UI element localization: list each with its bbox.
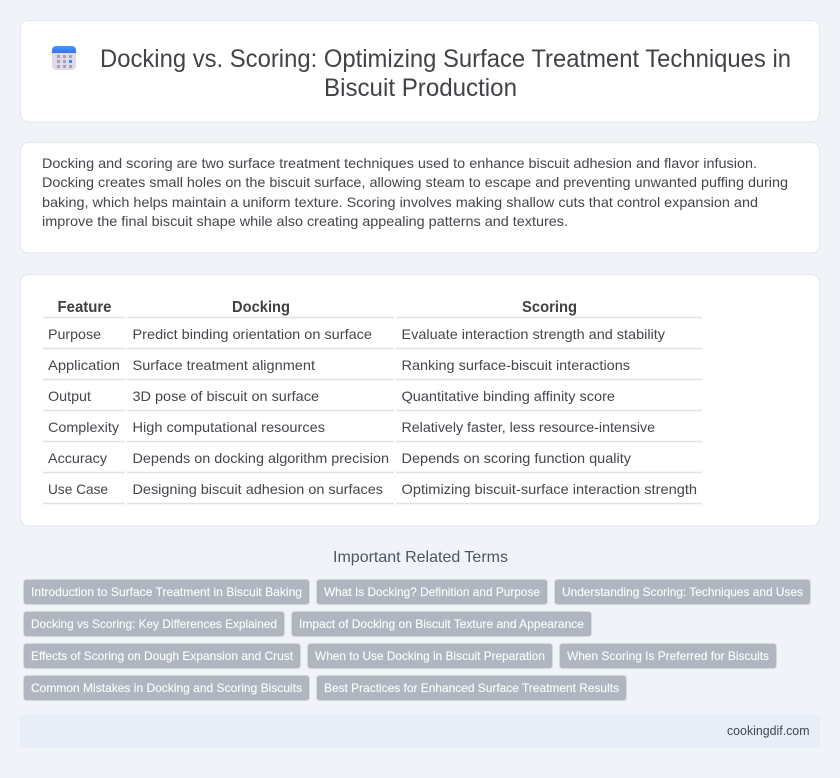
tag [292, 612, 592, 636]
tag [560, 644, 776, 668]
tag: Effects of Scoring on Dough Expansion and Crust [31, 649, 294, 663]
table header row: Scoring [522, 299, 577, 316]
text block: introduction [42, 155, 788, 229]
panel: header [20, 20, 820, 122]
tag: When to Use Docking in Biscuit Preparation [315, 649, 545, 663]
icon: calendar [52, 46, 76, 70]
text block: introduction: Docking creates small holes on the biscuit surface, allowing steam to escape and preventing unwanted puffing during [42, 174, 788, 190]
text block: introduction: baking, which helps maintain a uniform texture. Scoring involves making shallow cuts that control expansion and [42, 194, 758, 210]
text block: introduction: Docking and scoring are two surface treatment techniques used to enhance biscuit adhesion and flavor infusion. [42, 155, 757, 171]
table row: Use Case: Use Case [48, 481, 108, 497]
table row: Output: Quantitative binding affinity score [402, 388, 615, 404]
tag: Best Practices for Enhanced Surface Treatment Results [324, 681, 619, 695]
heading: related terms: Important Related Terms [333, 549, 508, 566]
title [100, 45, 791, 102]
table row: Output: 3D pose of biscuit on surface [132, 388, 319, 404]
text block: introduction: improve the final biscuit shape while also creating appealing patterns and textures. [42, 213, 568, 229]
table row: Purpose [43, 326, 702, 348]
tag [316, 580, 548, 604]
table row: Application: Ranking surface-biscuit interactions [402, 357, 630, 373]
title: Docking vs. Scoring: Optimizing Surface Treatment Techniques in [100, 45, 791, 73]
tag [24, 580, 310, 604]
title: Biscuit Production [324, 74, 517, 102]
tag [24, 612, 284, 636]
tag: What Is Docking? Definition and Purpose [324, 585, 540, 599]
tag [308, 644, 552, 668]
panel: related term tags [24, 580, 810, 700]
table row: Purpose: Purpose [48, 326, 101, 342]
tag: When Scoring Is Preferred for Biscuits [567, 649, 769, 663]
table row: Use Case: Designing biscuit adhesion on surfaces [132, 481, 383, 497]
table row: Accuracy [43, 450, 702, 472]
tag [24, 676, 310, 700]
table header row [43, 299, 702, 318]
tag [24, 644, 300, 668]
table row: Use Case [43, 481, 702, 504]
tag: Docking vs Scoring: Key Differences Explained [31, 617, 277, 631]
tag [554, 580, 810, 604]
table row: Complexity: High computational resources [132, 419, 325, 435]
table row: Complexity: Relatively faster, less resource-intensive [402, 419, 655, 435]
panel: introduction paragraph [20, 142, 820, 253]
table row: Use Case: Optimizing biscuit-surface interaction strength [402, 481, 697, 497]
table row: Purpose: Predict binding orientation on surface [132, 326, 372, 342]
tag: Introduction to Surface Treatment in Biscuit Baking [31, 585, 302, 599]
table row: Complexity: Complexity [48, 419, 119, 435]
table row: Complexity [43, 419, 702, 442]
footer [20, 714, 820, 748]
tag [316, 676, 626, 700]
table header row: Feature [58, 299, 112, 316]
table row: Output: Output [48, 388, 91, 404]
table row: Accuracy: Depends on docking algorithm precision [132, 450, 389, 466]
tag: Impact of Docking on Biscuit Texture and Appearance [299, 617, 584, 631]
table row: Output [43, 388, 702, 410]
footer source text: cookingdif.com [727, 723, 810, 738]
tag: Common Mistakes in Docking and Scoring Biscuits [31, 681, 302, 695]
table row: Accuracy: Accuracy [48, 450, 107, 466]
table row: Purpose: Evaluate interaction strength and stability [402, 326, 665, 342]
table row: Accuracy: Depends on scoring function quality [402, 450, 631, 466]
table row: Application: Surface treatment alignment [132, 357, 315, 373]
table row: Application [43, 357, 702, 380]
panel: comparison table [20, 274, 820, 526]
table header row: Docking [232, 299, 290, 316]
table row: Application: Application [48, 357, 120, 373]
tag: Understanding Scoring: Techniques and Uses [562, 585, 803, 599]
